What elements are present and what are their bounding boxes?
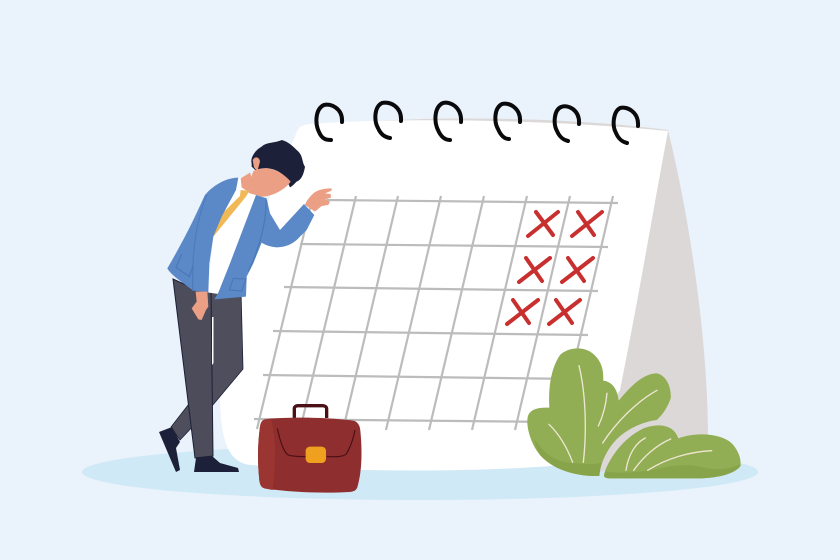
calendar page <box>220 120 668 470</box>
plant: left leaf shadow <box>534 438 602 476</box>
calendar top page edge <box>298 118 668 140</box>
briefcase flap line <box>277 428 355 457</box>
front shoe <box>194 456 239 472</box>
ground shadow ellipse <box>82 444 758 500</box>
jacket seams <box>176 195 266 291</box>
ear <box>253 157 260 171</box>
calendar binding rings <box>316 103 638 143</box>
left hand <box>192 292 208 320</box>
plant: right leaves <box>604 425 741 478</box>
jacket left panel <box>167 178 238 292</box>
upper body <box>167 140 332 320</box>
calendar grid <box>254 196 618 430</box>
back leg <box>171 285 243 440</box>
man <box>159 140 332 472</box>
plant <box>527 348 741 478</box>
neck <box>241 173 258 196</box>
front leg <box>173 279 213 458</box>
back shoe <box>159 427 180 472</box>
right hand <box>305 188 332 212</box>
jacket right panel and arm <box>214 195 314 299</box>
briefcase body <box>258 418 362 493</box>
briefcase <box>258 406 362 493</box>
calendar stand back <box>590 130 708 472</box>
briefcase side panel <box>258 419 275 490</box>
plant: right leaf shadow <box>604 464 741 478</box>
red crosses <box>507 212 602 324</box>
plant: leaf veins <box>549 366 712 470</box>
plant: left leaves <box>527 348 671 476</box>
hair <box>251 140 305 187</box>
tie <box>213 190 249 237</box>
gap between legs <box>212 317 214 365</box>
briefcase clasp <box>306 447 326 463</box>
face <box>251 168 291 197</box>
shirt <box>207 177 258 294</box>
briefcase handle <box>294 406 327 418</box>
